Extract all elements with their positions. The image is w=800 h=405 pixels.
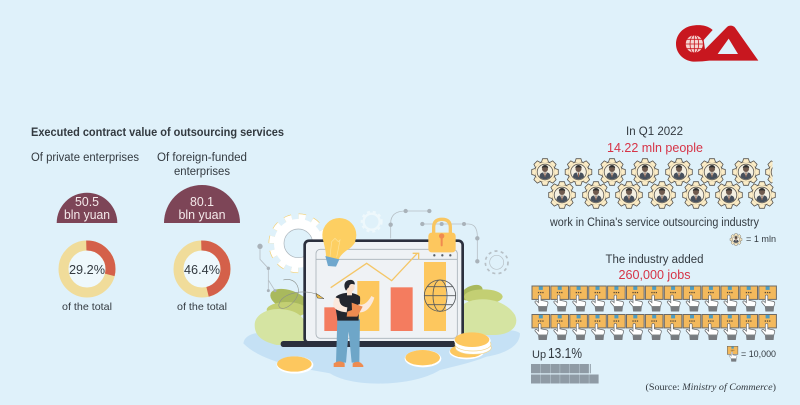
bushes — [255, 282, 516, 345]
label: of foreign-funded enterprises: Of foreign-funded — [157, 152, 247, 164]
panel: foreign-funded enterprises — [157, 152, 247, 313]
icon: globe — [424, 280, 456, 311]
legend: box equals 10,000: = 10,000 — [741, 349, 776, 360]
large gear — [272, 217, 325, 270]
icon: light bulb — [322, 218, 356, 267]
person — [333, 280, 374, 367]
legend: box equals 10,000 — [727, 346, 776, 362]
logo globe — [685, 35, 703, 53]
ground blob — [243, 330, 520, 384]
text: 260,000 jobs: 260,000 jobs — [618, 267, 691, 282]
legend: gear equals 1 mln — [730, 234, 776, 245]
dashed loop arrow — [279, 279, 324, 308]
trend arrow — [331, 253, 419, 288]
pictogram: job boxes with hands — [532, 286, 776, 340]
pictogram: gears with workers — [532, 159, 792, 208]
text: up 13.1%: Up — [532, 349, 549, 361]
label: of private enterprises: Of private enterprises — [31, 152, 139, 164]
panel: private enterprises — [31, 152, 139, 313]
semicircle value 50.5 bln yuan: 50.5 — [75, 194, 99, 209]
semicircle value 80.1 bln yuan — [164, 185, 240, 223]
small gears — [362, 212, 508, 273]
semicircle value 80.1 bln yuan: 80.1 — [190, 194, 214, 209]
label: of foreign-funded enterprises: enterprises — [174, 166, 230, 178]
label: of the total: of the total — [62, 301, 112, 313]
source note: (Source: Ministry of Commerce ) — [646, 382, 776, 393]
semicircle value 50.5 bln yuan: bln yuan — [64, 207, 110, 222]
semicircle value 80.1 bln yuan: bln yuan — [178, 207, 226, 222]
circuit lines — [257, 209, 479, 292]
icon: padlock — [428, 219, 456, 256]
legend: gear equals 1 mln: = 1 mln — [746, 234, 776, 244]
text: up 13.1%: 13.1% — [548, 345, 582, 362]
pictogram: growth squares — [531, 364, 599, 384]
coins — [277, 332, 491, 374]
laptop base — [281, 341, 457, 347]
heading: executed contract value: Executed contract value of outsourcing services — [31, 127, 284, 139]
donut chart 46.4%: 46.4% — [184, 262, 220, 277]
donut chart 29.2% — [64, 246, 110, 292]
logo: CA with globe — [676, 25, 758, 62]
illustration: person presenting laptop chart — [243, 209, 520, 384]
label: of the total: of the total — [177, 301, 227, 313]
bar chart — [324, 262, 446, 331]
browser window — [316, 249, 457, 338]
text: the industry added: The industry added — [606, 254, 704, 266]
laptop screen — [305, 241, 463, 343]
donut chart 46.4% — [178, 246, 226, 292]
text: 14.22 mln people: 14.22 mln people — [607, 140, 703, 155]
semicircle value 50.5 bln yuan — [57, 193, 117, 223]
text: in Q1 2022: In Q1 2022 — [626, 126, 683, 138]
donut chart 29.2%: 29.2% — [69, 262, 105, 277]
logo letters C and A — [676, 25, 758, 62]
text: work in China's service outsourcing industry: work in China's service outsourcing industry — [549, 217, 759, 229]
